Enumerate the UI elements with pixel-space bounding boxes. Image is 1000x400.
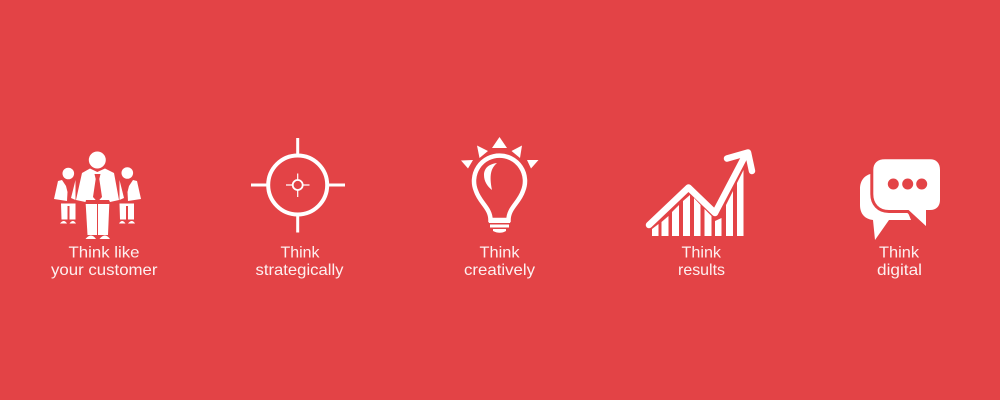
icon detail: arrowhead [727,152,752,171]
icon detail: trend line [649,154,746,225]
label: think like your customer: your customer [51,262,158,279]
label: think strategically: Think [280,244,320,262]
item: think results [649,152,752,279]
icon: rising chart with arrow [649,152,752,236]
label: think like your customer: Think like [68,244,140,262]
icon detail: front bubble [872,158,942,230]
label: think strategically: strategically [256,262,344,279]
label: think creatively [464,244,535,279]
item: think creatively [461,137,538,279]
icon detail: bulb base [489,218,510,233]
label: think results: results [678,262,725,279]
item: think digital [860,158,942,279]
label: think strategically [256,244,344,279]
label: think results [678,244,725,279]
icon detail: rays [461,137,538,168]
icon detail: red tie [93,174,102,202]
item: think strategically [251,138,345,279]
icon detail: bulb outline [474,156,525,220]
icon: crosshair target [251,138,345,232]
icon: group of people [54,152,141,239]
item: think like your customer [51,152,158,279]
icon detail: dots [888,178,927,190]
icon detail: highlight [484,163,497,190]
label: think digital: digital [877,262,922,279]
label: think creatively: Think [480,244,521,262]
label: think like your customer [51,244,158,279]
label: think digital: Think [879,244,920,262]
icon detail: bars [652,170,744,236]
icon: speech bubbles [860,158,942,240]
label: think results: Think [682,244,722,262]
label: think creatively: creatively [464,262,535,279]
icon detail: back bubble [860,173,911,240]
label: think digital [877,244,922,279]
icon: light bulb [461,137,538,233]
